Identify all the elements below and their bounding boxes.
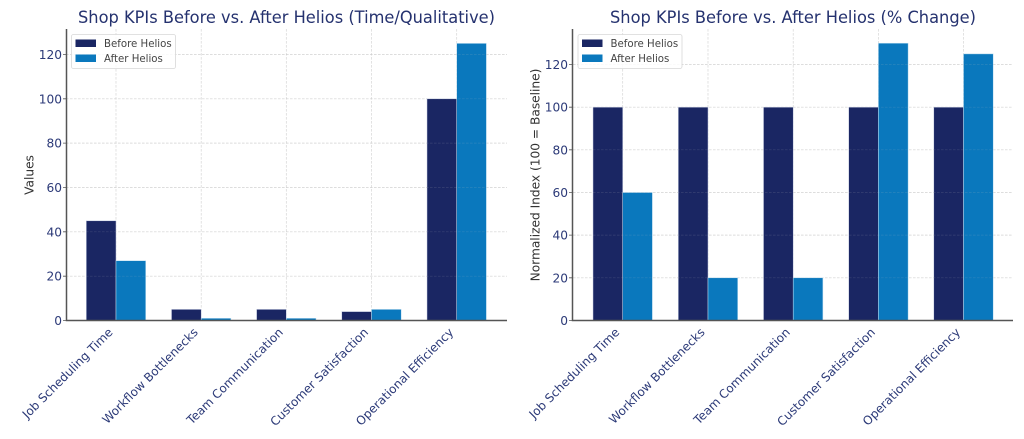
right y-axis label: Normalized Index (100 = Baseline) xyxy=(528,69,542,281)
left y-axis tick labels: 40 xyxy=(46,225,62,239)
left y-axis tick labels: 0 xyxy=(54,314,62,328)
right x-axis category labels: Job Scheduling Time xyxy=(526,325,622,422)
panel: left chart, time and qualitative KPIs xyxy=(19,8,507,429)
bars: Customer Satisfaction xyxy=(342,309,401,320)
right y-axis tick labels: 100 xyxy=(545,101,568,115)
left y-axis tick labels: 20 xyxy=(46,270,62,284)
bars: Team Communication xyxy=(764,107,823,320)
left x-axis category labels: Job Scheduling Time xyxy=(19,325,116,422)
right y-axis tick labels: 20 xyxy=(552,271,568,285)
left x-axis category labels: Workflow Bottlenecks xyxy=(99,325,201,427)
left y-axis tick labels: 60 xyxy=(46,181,62,195)
right x-axis category labels: Workflow Bottlenecks xyxy=(606,325,708,427)
bars: Team Communication xyxy=(257,309,316,320)
right y-axis tick labels: 120 xyxy=(545,58,568,72)
bars: Job Scheduling Time xyxy=(86,221,146,320)
left chart legend: Before Helios xyxy=(104,39,172,50)
left chart bars xyxy=(86,43,486,321)
left y-axis tick labels: 100 xyxy=(39,92,62,106)
left chart legend: After Helios xyxy=(104,54,163,65)
left x-axis category labels xyxy=(19,325,456,429)
right chart legend xyxy=(578,34,682,68)
panel: right chart, percent change KPIs xyxy=(526,8,1013,429)
right y-axis tick labels xyxy=(545,58,568,328)
left y-axis tick labels xyxy=(39,48,62,328)
right x-axis category labels: Team Communication xyxy=(690,325,793,428)
right y-axis tick labels: 40 xyxy=(552,229,568,243)
right x-axis category labels: Customer Satisfaction xyxy=(774,325,878,429)
left chart title: Shop KPIs Before vs. After Helios (Time/Qualitative) xyxy=(78,8,495,27)
left chart legend xyxy=(72,34,176,68)
bars: Operational Efficiency xyxy=(427,43,486,321)
bars: Customer Satisfaction xyxy=(849,43,908,320)
right chart legend: Before Helios xyxy=(610,39,678,50)
right y-axis tick labels: 60 xyxy=(552,186,568,200)
left x-axis category labels: Customer Satisfaction xyxy=(268,325,371,429)
right chart bars xyxy=(593,43,993,320)
left y-axis tick labels: 80 xyxy=(46,137,62,151)
bars: Job Scheduling Time xyxy=(593,107,652,320)
left y-axis label: Values xyxy=(22,155,36,195)
left y-axis tick labels: 120 xyxy=(39,48,62,62)
right x-axis category labels: Operational Efficiency xyxy=(860,325,963,428)
right chart title: Shop KPIs Before vs. After Helios (% Change) xyxy=(610,8,976,27)
bars: Operational Efficiency xyxy=(934,54,993,321)
bars: Workflow Bottlenecks xyxy=(678,107,738,320)
bars: Workflow Bottlenecks xyxy=(172,309,231,320)
right y-axis tick labels: 80 xyxy=(552,143,568,157)
right y-axis tick labels: 0 xyxy=(560,314,568,328)
right chart legend: After Helios xyxy=(610,54,669,65)
left x-axis category labels: Team Communication xyxy=(183,325,286,428)
right x-axis category labels xyxy=(526,325,963,429)
left x-axis category labels: Operational Efficiency xyxy=(353,325,456,428)
